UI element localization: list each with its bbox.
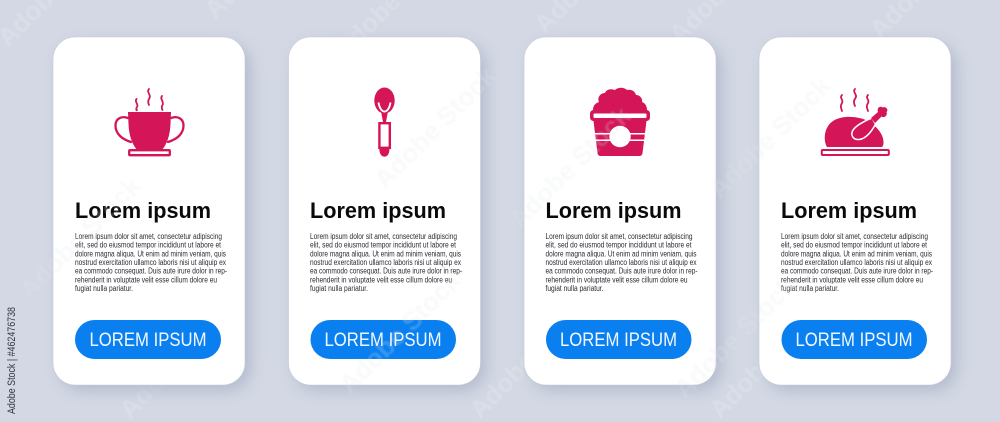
body text: nostrud exercitation ullamco laboris nisi ut aliquip ex <box>781 258 932 267</box>
body text: dolore magna aliqua. Ut enim ad minim veniam, quis <box>546 249 697 258</box>
watermarks: Adobe Stock <box>13 170 147 304</box>
watermarks: Adobe Stock <box>668 270 802 404</box>
button: LOREM IPSUM <box>560 329 677 351</box>
credit: stock id: Adobe Stock | #462476738 <box>6 307 18 414</box>
button: LOREM IPSUM <box>796 329 912 351</box>
body text: Lorem ipsum dolor sit amet, consectetur adipiscing <box>310 232 457 241</box>
watermarks: Adobe Stock <box>333 265 467 399</box>
heading: Lorem ipsum <box>781 198 917 223</box>
body text: ea commodo consequat. Duis aute irure dolor in rep- <box>75 267 227 276</box>
heading: Lorem ipsum <box>310 198 446 223</box>
watermarks: Adobe Stock <box>703 70 837 204</box>
body text: fugiat nulla pariatur. <box>546 284 604 293</box>
body text: nostrud exercitation ullamco laboris nisi ut aliquip ex <box>546 258 697 267</box>
body text: rehenderit in voluptate velit esse cillum dolore eu <box>546 275 688 284</box>
body text: ea commodo consequat. Duis aute irure dolor in rep- <box>310 267 462 276</box>
panel: card 1, cup <box>53 37 245 385</box>
body text: nostrud exercitation ullamco laboris nisi ut aliquip ex <box>310 258 461 267</box>
watermarks: Adobe Stock <box>368 60 502 194</box>
body text: dolore magna aliqua. Ut enim ad minim veniam, quis <box>781 249 932 258</box>
heading: Lorem ipsum <box>75 198 211 223</box>
watermarks <box>13 60 837 404</box>
body text: fugiat nulla pariatur. <box>781 284 839 293</box>
button <box>310 320 456 359</box>
body text: elit, sed do eiusmod tempor incididunt ut labore et <box>75 241 222 250</box>
body text: Lorem ipsum dolor sit amet, consectetur adipiscing <box>75 232 222 241</box>
body text: fugiat nulla pariatur. <box>310 284 368 293</box>
body text: rehenderit in voluptate velit esse cillum dolore eu <box>781 275 923 284</box>
panel: card 2, spoon <box>288 37 480 385</box>
body text: rehenderit in voluptate velit esse cillum dolore eu <box>310 275 452 284</box>
body text <box>546 232 698 293</box>
button <box>75 320 221 359</box>
heading: Lorem ipsum <box>546 198 682 223</box>
icon: popcorn bucket <box>590 88 650 156</box>
button <box>546 320 692 359</box>
body text <box>75 232 227 293</box>
body text: rehenderit in voluptate velit esse cillum dolore eu <box>75 275 217 284</box>
text: Adobe <box>703 346 781 422</box>
panel: card 4, roast chicken <box>759 37 951 385</box>
watermarks: Adobe Stock <box>503 100 637 234</box>
body text: dolore magna aliqua. Ut enim ad minim veniam, quis <box>310 249 461 258</box>
body text <box>781 232 933 293</box>
button: LOREM IPSUM <box>324 329 442 351</box>
icon: spoon <box>374 88 395 157</box>
body text: Lorem ipsum dolor sit amet, consectetur adipiscing <box>781 232 928 241</box>
icon: roast chicken <box>822 89 889 155</box>
body text: dolore magna aliqua. Ut enim ad minim veniam, quis <box>75 249 226 258</box>
body text: elit, sed do eiusmod tempor incididunt ut labore et <box>310 241 457 250</box>
button <box>782 320 927 359</box>
panel: card 3, popcorn bucket <box>524 37 716 385</box>
text: Adobe <box>113 346 191 422</box>
body text: elit, sed do eiusmod tempor incididunt ut labore et <box>781 241 928 250</box>
body text: ea commodo consequat. Duis aute irure dolor in rep- <box>546 267 698 276</box>
icon: steaming cup <box>116 89 184 155</box>
button: LOREM IPSUM <box>90 329 206 351</box>
body text: Lorem ipsum dolor sit amet, consectetur adipiscing <box>546 232 692 241</box>
body text: fugiat nulla pariatur. <box>75 284 133 293</box>
body text: nostrud exercitation ullamco laboris nisi ut aliquip ex <box>75 258 226 267</box>
text: Adobe <box>463 346 541 422</box>
body text: ea commodo consequat. Duis aute irure dolor in rep- <box>781 267 933 276</box>
body text: elit, sed do eiusmod tempor incididunt ut labore et <box>546 241 692 250</box>
body text <box>310 232 462 293</box>
